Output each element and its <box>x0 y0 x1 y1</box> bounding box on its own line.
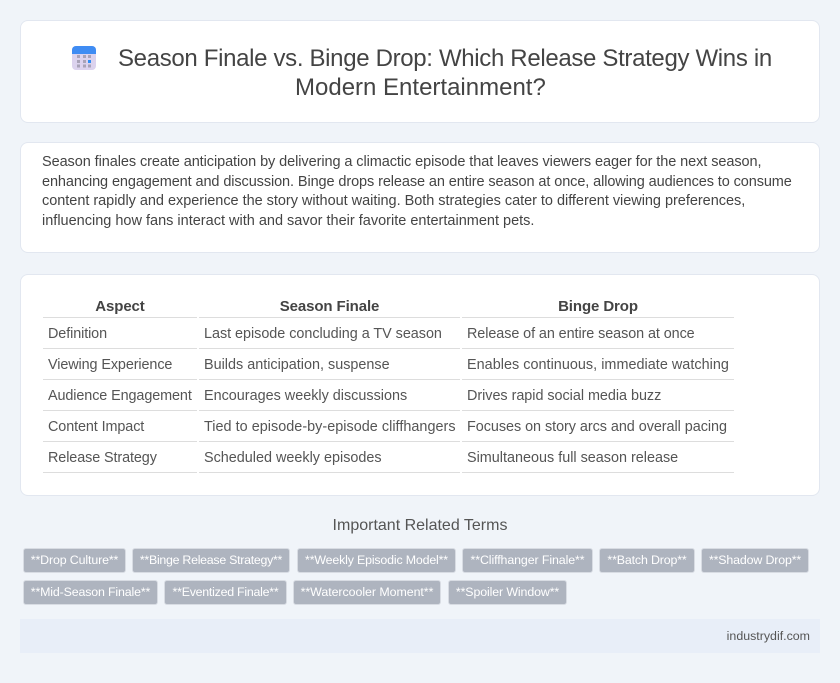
comparison table: Encourages weekly discussions <box>204 388 407 404</box>
comparison table: Enables continuous, immediate watching <box>467 357 729 373</box>
comparison table: Release of an entire season at once <box>467 326 695 342</box>
related term tags: **Mid-Season Finale** <box>31 585 150 599</box>
comparison table: Viewing Experience <box>48 357 172 373</box>
title <box>118 45 772 101</box>
intro text: content rapidly and experience the story without waiting. Both strategies cater to different viewing preferences, <box>42 193 745 209</box>
comparison table: Binge Drop <box>558 298 638 315</box>
related term tags: **Eventized Finale** <box>173 585 278 599</box>
comparison table: Drives rapid social media buzz <box>467 388 661 404</box>
related term tags: **Cliffhanger Finale** <box>470 553 584 567</box>
related term tags: **Watercooler Moment** <box>301 585 433 599</box>
related term tags: **Spoiler Window** <box>456 585 559 599</box>
comparison table: Audience Engagement <box>48 388 192 404</box>
related term tags: **Batch Drop** <box>607 553 687 567</box>
comparison table: Scheduled weekly episodes <box>204 450 382 466</box>
heading: related terms: Important Related Terms <box>333 517 507 534</box>
header panel <box>20 20 820 123</box>
intro text: Season finales create anticipation by delivering a climactic episode that leaves viewers eager for the next season, <box>42 154 761 170</box>
comparison table <box>43 298 734 473</box>
comparison table: Aspect <box>95 298 145 315</box>
title: Season Finale vs. Binge Drop: Which Release Strategy Wins in <box>118 45 772 72</box>
comparison table: Builds anticipation, suspense <box>204 357 390 373</box>
related term tags: **Binge Release Strategy** <box>140 553 282 567</box>
comparison table: Content Impact <box>48 419 144 435</box>
comparison table: Focuses on story arcs and overall pacing <box>467 419 727 435</box>
panel: intro <box>20 142 820 253</box>
intro text: influencing how fans interact with and savor their favorite entertainment pets. <box>42 212 534 228</box>
comparison table: Season Finale <box>280 298 379 315</box>
related term tags: **Shadow Drop** <box>709 553 801 567</box>
related term tags: **Drop Culture** <box>31 553 118 567</box>
comparison table: Last episode concluding a TV season <box>204 326 442 342</box>
footer source: industrydif.com <box>727 629 810 643</box>
footer bar <box>20 619 820 653</box>
comparison table: Release Strategy <box>48 450 157 466</box>
panel: comparison table <box>20 274 820 496</box>
intro text: enhancing engagement and discussion. Binge drops release an entire season at once, allowing audiences to consume <box>42 174 792 190</box>
related term tags <box>23 548 809 605</box>
comparison table: Simultaneous full season release <box>467 450 678 466</box>
comparison table: Tied to episode-by-episode cliffhangers <box>204 419 456 435</box>
icon: calendar <box>72 46 96 70</box>
title: Modern Entertainment? <box>295 74 546 101</box>
related term tags: **Weekly Episodic Model** <box>305 553 448 567</box>
intro text <box>42 154 792 228</box>
comparison table: Definition <box>48 326 107 342</box>
